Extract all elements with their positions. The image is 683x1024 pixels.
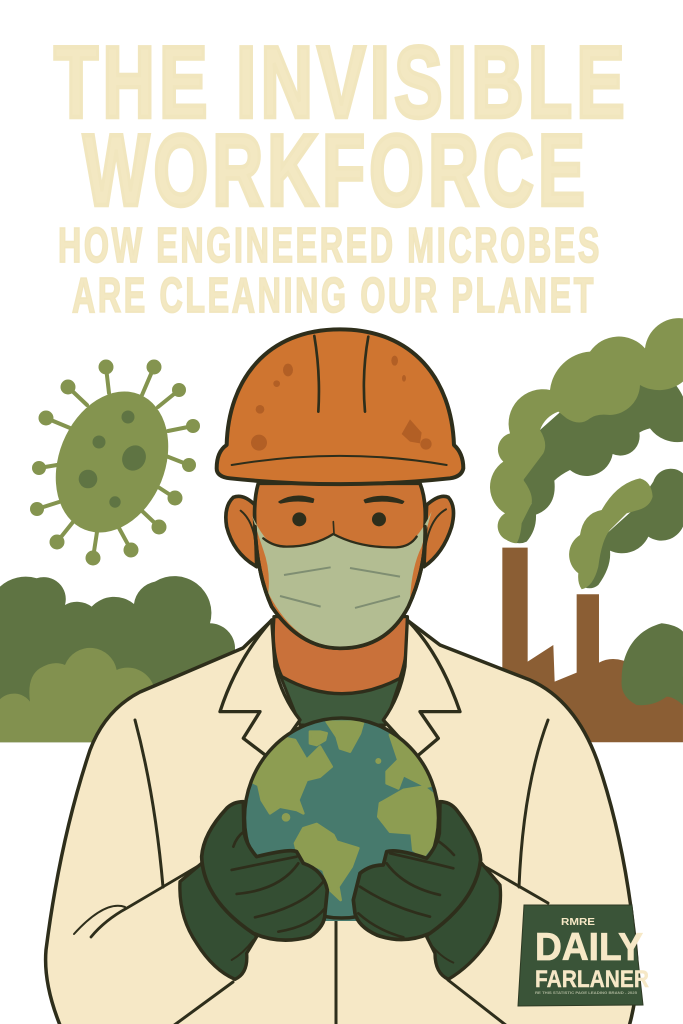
neck (273, 617, 408, 694)
publisher badge: DAILY (535, 926, 643, 969)
sleeve folds (74, 720, 548, 1024)
factory with smoke (490, 318, 683, 742)
left glove cuff (180, 863, 257, 979)
lapel left (220, 620, 300, 760)
mask (252, 512, 432, 647)
smoke: light plume right (569, 478, 653, 589)
smoke: dark plume left (512, 382, 683, 543)
publisher badge: FARLANER (535, 966, 649, 993)
lab coat (46, 620, 637, 1024)
smoke: light plume left (490, 318, 683, 543)
head and hard hat (217, 329, 463, 760)
publisher badge: RMRE (561, 916, 595, 928)
eyes and brows (279, 497, 403, 526)
face (255, 483, 425, 648)
icon: microbe (30, 360, 200, 566)
subtitle (58, 219, 602, 323)
back bushes (0, 576, 235, 742)
smoke: dark plume right (580, 469, 683, 588)
publisher badge (518, 905, 649, 1006)
globe (244, 718, 440, 921)
shirt (280, 675, 402, 725)
right gloved hand (353, 802, 481, 940)
bush right (622, 623, 683, 705)
hard hat (217, 329, 463, 484)
factory silhouette (502, 548, 683, 742)
ear right (424, 496, 454, 567)
publisher badge: RE THIS STATISTIC PAGE LEADING BRAND - 2025 (535, 990, 638, 995)
lapel right (383, 620, 460, 757)
ear left (226, 496, 257, 567)
title (54, 27, 629, 227)
left gloved hand (202, 802, 327, 940)
front bushes (0, 648, 153, 742)
right glove cuff (427, 863, 501, 979)
